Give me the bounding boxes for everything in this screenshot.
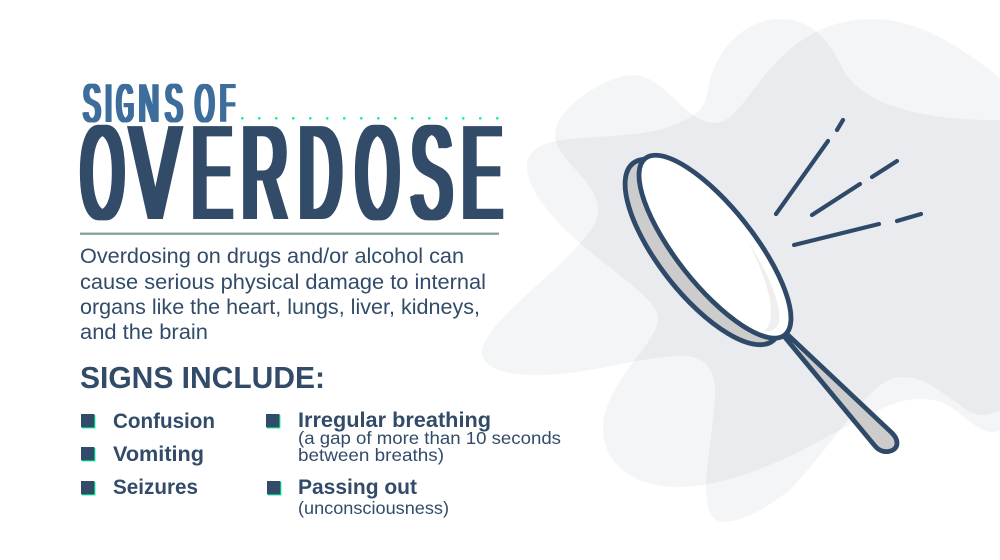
item: confusion: Confusion (113, 409, 215, 433)
title line: signs of: G (117, 72, 134, 134)
intro text: and the brain (80, 321, 208, 344)
title line: overdose: V (131, 97, 180, 248)
item: irregular breathing: (a gap of more than 10 seconds (298, 428, 561, 448)
list: left column signs (81, 409, 215, 499)
list: right column signs (266, 408, 561, 518)
text: E (462, 97, 502, 248)
magnifier rim (599, 136, 807, 368)
title line: signs of: O (195, 72, 214, 134)
item: vomiting: Vomiting (113, 442, 204, 466)
item: irregular breathing: between breaths) (298, 445, 444, 465)
title line: overdose: O (356, 97, 399, 248)
item: passing out: (unconsciousness) (298, 498, 449, 518)
magnifier lens (615, 135, 815, 359)
item: passing out: Passing out (298, 475, 417, 499)
title line: overdose: S (411, 97, 452, 248)
item: irregular breathing (266, 408, 561, 465)
title underline (80, 233, 499, 235)
lens highlight (747, 240, 779, 331)
background blobs (482, 19, 1000, 522)
dotted rule (242, 117, 498, 120)
title line: overdose: E (192, 97, 232, 248)
title: F (220, 72, 235, 134)
intro text: cause serious physical damage to internal (80, 271, 486, 294)
title line: signs of: N (139, 72, 159, 134)
title line: signs of: S (83, 72, 100, 134)
intro text: organs like the heart, lungs, liver, kidneys, (80, 296, 480, 319)
item: seizures: Seizures (113, 475, 198, 499)
intro text: Overdosing on drugs and/or alcohol can (80, 245, 464, 268)
icon: magnifying glass (599, 135, 897, 452)
heading: signs include: SIGNS INCLUDE: (80, 361, 325, 395)
icon: shine rays (776, 120, 921, 245)
title (81, 72, 502, 248)
title line: overdose: O (81, 97, 124, 248)
item: irregular breathing: Irregular breathing (298, 408, 491, 432)
title line: signs of: I (106, 72, 112, 134)
title line: overdose: D (299, 97, 341, 248)
title line: signs of: S (165, 72, 182, 134)
item: passing out (267, 475, 449, 518)
magnifier handle (783, 335, 897, 452)
intro text (80, 245, 486, 344)
title line: overdose: R (242, 97, 287, 248)
